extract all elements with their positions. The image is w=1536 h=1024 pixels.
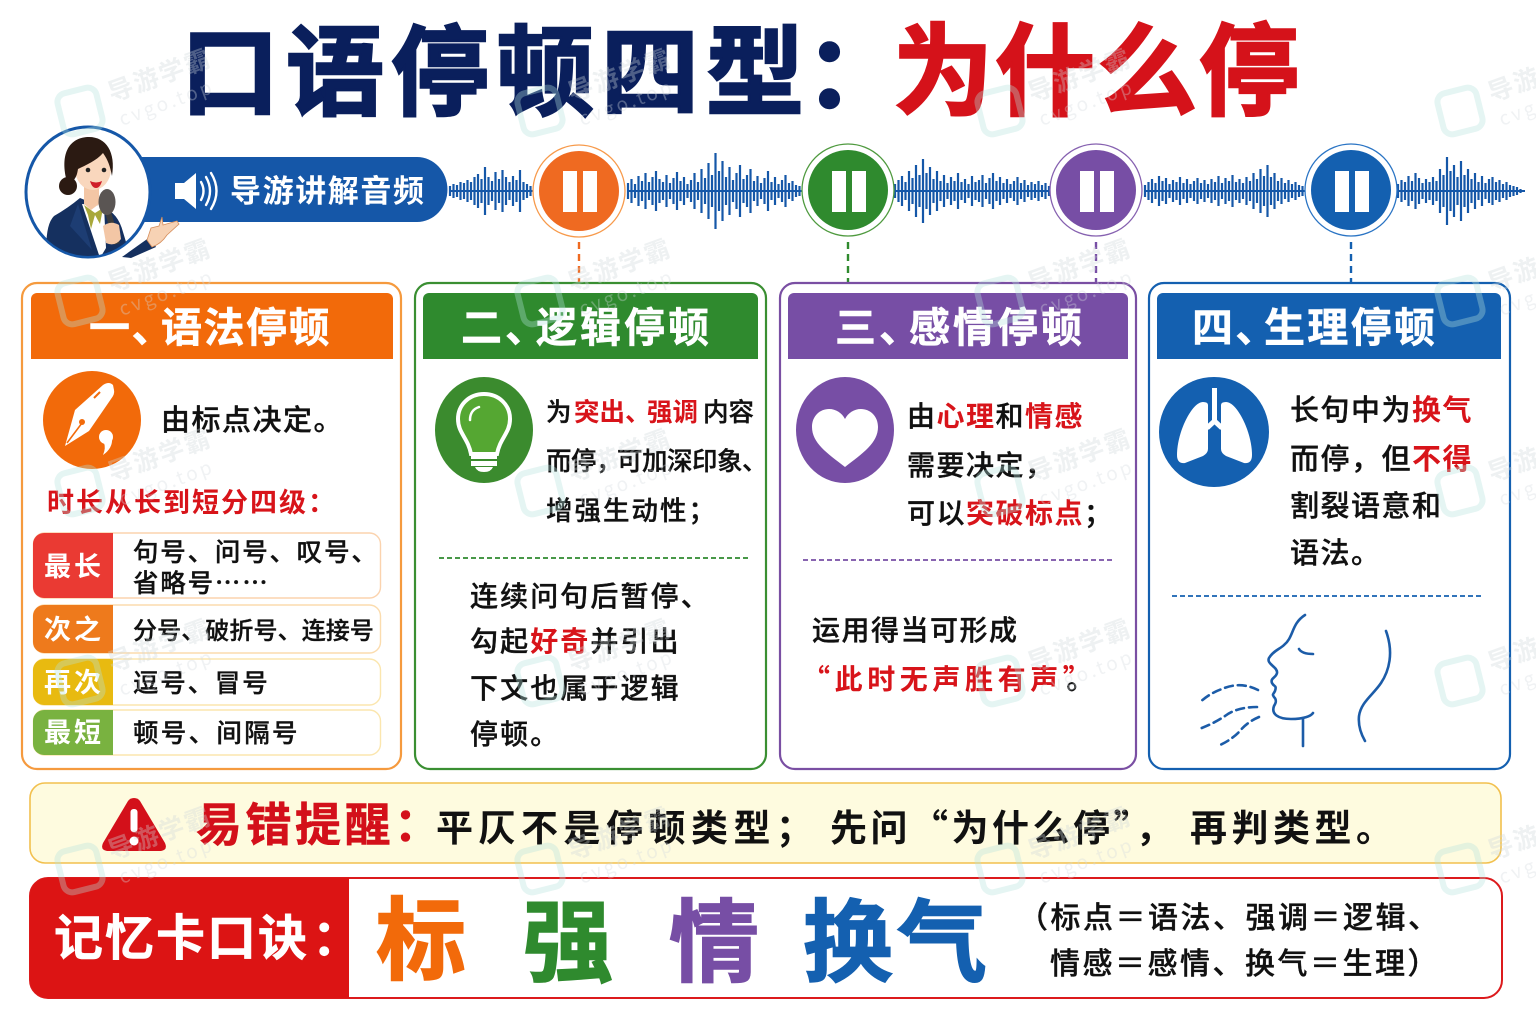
text: logical example: 下文也属于逻辑 bbox=[470, 667, 681, 707]
heading: grammatical pause bbox=[31, 293, 393, 359]
warning text: 先问“为什么停”， bbox=[830, 798, 1176, 852]
text: logical description: 内容 bbox=[703, 392, 754, 429]
icon: speaker bbox=[175, 173, 216, 209]
watermarks: 导游学霸 bbox=[1022, 797, 1136, 868]
text: emotional description: 可以突破标点； bbox=[907, 492, 1114, 532]
audio waveform bbox=[449, 153, 1525, 229]
text: logical description: 强调 bbox=[647, 392, 698, 429]
text: rule: 由标点决定。 bbox=[161, 397, 344, 439]
audio label text: 导游讲解音频 bbox=[230, 166, 426, 211]
row: second bbox=[33, 605, 380, 653]
row: longest: 句号、问号、叹号、 bbox=[133, 532, 379, 569]
icon: warning triangle bbox=[102, 798, 166, 851]
mnemonic legend: 情感＝感情、换气＝生理） bbox=[1050, 939, 1440, 983]
watermarks: 导游学霸 bbox=[562, 609, 676, 680]
text: physiological description: 语法。 bbox=[1290, 530, 1382, 572]
text: logical description: 而停， bbox=[546, 441, 621, 478]
text: physiological description: 而停，但不得 bbox=[1290, 436, 1473, 478]
icon: light bulb bbox=[435, 377, 533, 483]
heading: logical pause: 逻辑停顿 bbox=[536, 294, 712, 354]
warning text bbox=[436, 798, 1398, 852]
watermarks: 导游学霸 bbox=[102, 797, 216, 868]
text: emotional effect bbox=[802, 609, 1099, 698]
watermarks: cvgo.top bbox=[115, 452, 218, 512]
pause marker: orange bbox=[533, 145, 625, 283]
text: logical description: 突出、 bbox=[574, 392, 651, 429]
row: second: 次之 bbox=[44, 608, 104, 647]
watermarks: 导游学霸 bbox=[1022, 419, 1136, 490]
icon: breathing profile bbox=[1199, 615, 1390, 746]
text: logical example: 停顿。 bbox=[470, 713, 560, 753]
mnemonic characters: 气 bbox=[897, 870, 987, 1000]
text: logical example bbox=[470, 575, 711, 753]
heading: physiological pause bbox=[1157, 293, 1501, 359]
warning text: 再判类型。 bbox=[1190, 798, 1398, 852]
text: logical description: 为 bbox=[546, 392, 572, 429]
icon: fountain pen and comma bbox=[43, 371, 141, 469]
heading: physiological pause: 生理停顿 bbox=[1264, 294, 1437, 354]
watermarks: 导游学霸 bbox=[1022, 229, 1136, 300]
icon: heart bbox=[796, 377, 894, 483]
mnemonic characters: 标 bbox=[376, 868, 466, 998]
text: logical example: 勾起好奇并引出 bbox=[470, 620, 681, 660]
text: logical description bbox=[546, 392, 767, 528]
row: shortest: 最短 bbox=[44, 711, 104, 750]
watermarks: cvgo.top bbox=[1035, 262, 1138, 322]
watermarks: 导游学霸 bbox=[562, 229, 676, 300]
panel: physiological pause bbox=[1149, 283, 1510, 769]
row: shortest bbox=[33, 710, 380, 755]
icon: lungs bbox=[1159, 377, 1269, 487]
warning text: 平仄不是停顿类型； bbox=[436, 798, 818, 852]
watermarks: cvgo.top bbox=[115, 642, 218, 702]
row: longest: 省略号…… bbox=[133, 563, 270, 600]
title bbox=[181, 0, 1301, 136]
watermarks: cvgo.top bbox=[1035, 72, 1138, 132]
watermarks: cvgo.top bbox=[1035, 830, 1138, 890]
text: emotional effect: “此时无声胜有声”。 bbox=[802, 658, 1099, 698]
watermarks: cvgo.top bbox=[575, 642, 678, 702]
row: shortest: 顿号、间隔号 bbox=[133, 713, 300, 750]
watermarks: cvgo.top bbox=[115, 72, 218, 132]
text: logical example: 连续问句后暂停、 bbox=[470, 575, 711, 615]
audio label pill bbox=[120, 157, 447, 222]
row: third: 再次 bbox=[44, 661, 104, 700]
watermarks: 导游学霸 bbox=[562, 419, 676, 490]
text: physiological description: 割裂语意和 bbox=[1290, 483, 1443, 525]
watermarks: 导游学霸 bbox=[1022, 39, 1136, 110]
mnemonic characters: 换 bbox=[803, 870, 893, 1000]
watermarks: 导游学霸 bbox=[102, 419, 216, 490]
microphone bbox=[98, 189, 121, 244]
heading: logical pause: 二、 bbox=[461, 294, 549, 354]
watermarks: cvgo.top bbox=[115, 262, 218, 322]
watermarks: 导游学霸 bbox=[562, 39, 676, 110]
memory card label bbox=[30, 878, 363, 998]
heading: physiological pause: 四、 bbox=[1192, 294, 1279, 354]
mnemonic characters bbox=[376, 868, 987, 1000]
text: logical description: 增强生动性； bbox=[546, 489, 717, 528]
row: third bbox=[33, 659, 380, 705]
text: emotional description: 需要决定， bbox=[907, 444, 1055, 484]
memory card bbox=[30, 868, 1502, 1000]
presenter avatar bbox=[26, 127, 179, 262]
watermarks: cvgo.top bbox=[575, 262, 678, 322]
watermarks: 导游学霸 bbox=[562, 797, 676, 868]
watermarks: cvgo.top bbox=[575, 72, 678, 132]
memory card label: 记忆卡口诀： bbox=[54, 899, 363, 970]
text: emotional description: 由心理和情感 bbox=[907, 395, 1084, 435]
watermarks: 导游学霸 bbox=[102, 229, 216, 300]
watermarks: 导游学霸 bbox=[102, 609, 216, 680]
text: logical description: 可加深印象、 bbox=[617, 441, 767, 478]
text: physiological description bbox=[1290, 387, 1473, 572]
panel: emotional pause bbox=[780, 283, 1136, 769]
pause marker: purple bbox=[1050, 144, 1142, 283]
open hand bbox=[147, 217, 179, 247]
panel: grammatical pause bbox=[22, 283, 401, 769]
heading: grammatical pause: 一、 bbox=[89, 294, 174, 354]
heading: emotional pause: 三、 bbox=[835, 294, 923, 354]
row: third: 逗号、冒号 bbox=[133, 663, 270, 700]
watermarks: cvgo.top bbox=[115, 830, 218, 890]
text: emotional description bbox=[907, 395, 1114, 532]
watermarks: cvgo.top bbox=[1035, 452, 1138, 512]
panel: logical pause bbox=[415, 283, 767, 769]
mnemonic legend: （标点＝语法、强调＝逻辑、 bbox=[1018, 893, 1440, 937]
heading: logical pause bbox=[423, 293, 758, 359]
watermarks: cvgo.top bbox=[575, 452, 678, 512]
row: second: 分号、破折号、连接号 bbox=[133, 611, 374, 646]
watermarks: cvgo.top bbox=[1035, 642, 1138, 702]
heading: emotional pause bbox=[788, 293, 1128, 359]
warning banner bbox=[30, 783, 1501, 863]
watermarks: 导游学霸 bbox=[1022, 609, 1136, 680]
mnemonic characters: 情 bbox=[669, 870, 759, 1000]
watermarks: 导游学霸 bbox=[102, 39, 216, 110]
heading: emotional pause: 感情停顿 bbox=[909, 294, 1085, 354]
text: four levels heading: 时长从长到短分四级： bbox=[47, 481, 337, 520]
row: longest: 最长 bbox=[44, 545, 104, 584]
text: physiological description: 长句中为换气 bbox=[1290, 387, 1473, 429]
row: longest bbox=[33, 532, 380, 600]
pause marker: green bbox=[802, 144, 894, 283]
mnemonic legend bbox=[1018, 893, 1440, 983]
text: emotional effect: 运用得当可形成 bbox=[812, 609, 1019, 649]
warning heading: 易错提醒： bbox=[196, 789, 444, 855]
presenter sleeve bbox=[122, 237, 156, 258]
heading: grammatical pause: 语法停顿 bbox=[161, 294, 331, 354]
watermarks: cvgo.top bbox=[575, 830, 678, 890]
pause marker: blue bbox=[1305, 144, 1397, 283]
mnemonic characters: 强 bbox=[523, 870, 613, 1000]
